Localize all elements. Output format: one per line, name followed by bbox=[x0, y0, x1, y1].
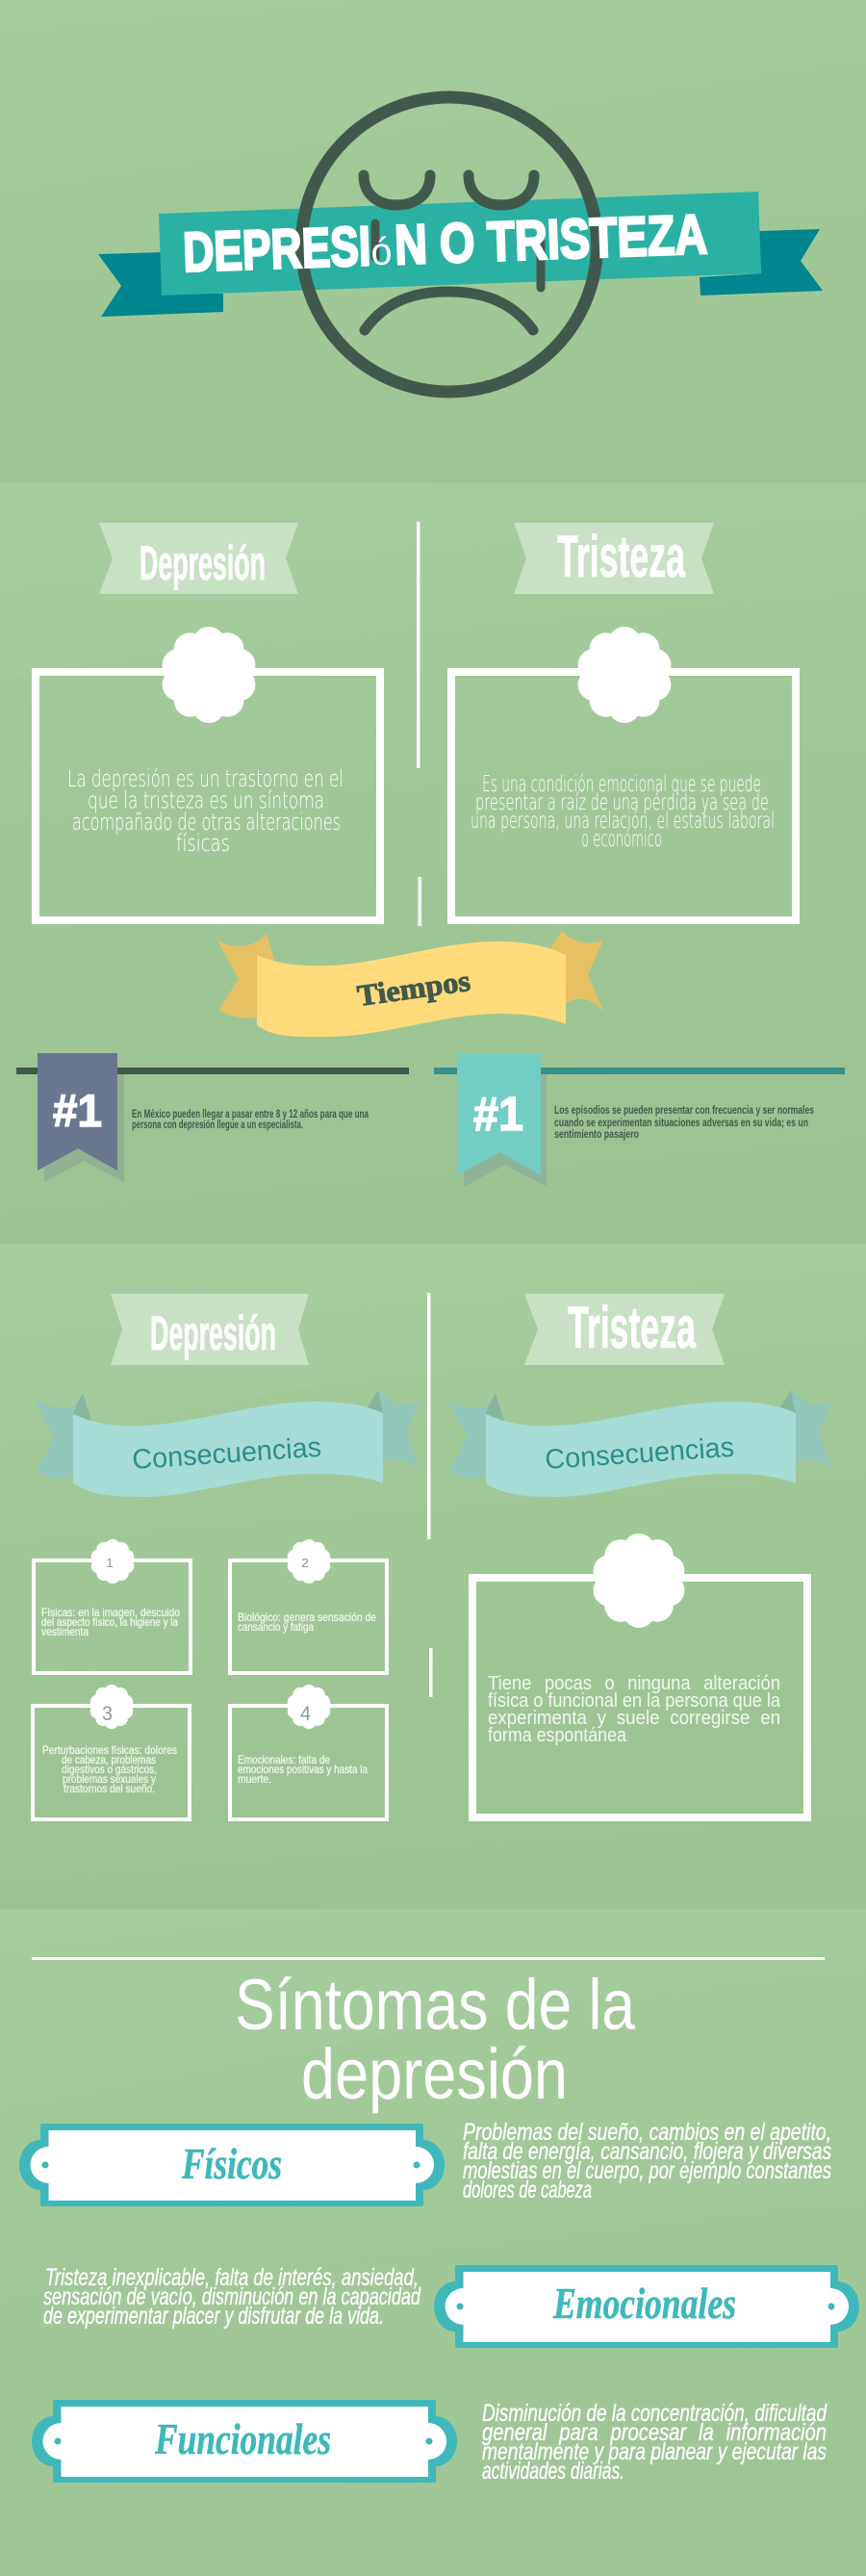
heading ribbon: Depresión consecuencias bbox=[111, 1294, 309, 1365]
bookmark #1 tristeza bbox=[457, 1053, 547, 1187]
plaque: Funcionales: Funcionales bbox=[154, 2414, 331, 2463]
panel: biológico bbox=[230, 1539, 387, 1673]
panel: físicas: vestimenta bbox=[41, 1625, 89, 1638]
panel: perturbaciones físicas bbox=[33, 1685, 190, 1819]
text: síntomas funcionales: actividades diarias. bbox=[482, 2458, 624, 2485]
banner main bbox=[159, 192, 761, 296]
panel: emocionales: 4 bbox=[300, 1703, 311, 1725]
heading ribbon: Depresión consecuencias: Depresión bbox=[150, 1306, 276, 1360]
heading ribbon: Tristeza consecuencias: Tristeza bbox=[568, 1295, 697, 1360]
heading ribbon: Tristeza consecuencias bbox=[524, 1294, 725, 1365]
text: síntomas emocionales: de experimentar placer y disfrutar de la vida. bbox=[43, 2303, 384, 2330]
panel: físicas: Físicas: en la imagen, descuido bbox=[41, 1606, 180, 1619]
title: Síntomas de la depresión: Síntomas de la bbox=[235, 1965, 636, 2045]
text block: física o funcional en la persona que la bbox=[488, 1690, 781, 1712]
text: tiempos depresión: En México pueden llegar a pasar entre 8 y 12 años para que una bbox=[132, 1109, 369, 1121]
vertical divider bbox=[427, 1293, 433, 1697]
title bbox=[182, 203, 708, 284]
panel: perturbaciones físicas: trastornos del sueño. bbox=[64, 1782, 155, 1795]
bookmark #1 depresión bbox=[38, 1053, 124, 1182]
text: tiempos tristeza bbox=[554, 1105, 814, 1141]
panel: físicas bbox=[34, 1539, 191, 1673]
plaque: Emocionales: Emocionales bbox=[552, 2279, 736, 2328]
text: tiempos depresión bbox=[132, 1109, 369, 1131]
panel: perturbaciones físicas: de cabeza, problemas bbox=[62, 1753, 156, 1766]
header: sad face with title banner bbox=[98, 97, 823, 392]
text block: Tiene pocas o ninguna alteración bbox=[488, 1673, 780, 1694]
text block: que la tristeza es un síntoma bbox=[88, 787, 324, 814]
icon: sad face bbox=[302, 97, 597, 392]
panel: consecuencias tristeza bbox=[472, 1533, 807, 1817]
panel: perturbaciones físicas: digestivos o gástricos, bbox=[62, 1763, 157, 1776]
panel: perturbaciones físicas: 3 bbox=[102, 1703, 113, 1725]
panel: definición tristeza bbox=[451, 627, 796, 920]
title: ó bbox=[370, 230, 393, 273]
text: tiempos tristeza: sentimiento pasajero bbox=[554, 1129, 639, 1141]
text block bbox=[488, 1673, 781, 1746]
text block: o económico bbox=[581, 827, 662, 852]
text block: forma espontánea bbox=[488, 1725, 627, 1746]
heading ribbon: Tristeza bbox=[514, 523, 714, 594]
text: tiempos depresión: persona con depresión llegue a un especialista. bbox=[132, 1120, 303, 1131]
ribbon: Consecuencias depresión bbox=[35, 1390, 420, 1497]
title: DEPRESI bbox=[182, 215, 371, 284]
title: Síntomas de la depresión: depresión bbox=[301, 2034, 568, 2114]
text: síntomas emocionales: Tristeza inexplicable, falta de interés, ansiedad, bbox=[45, 2264, 419, 2291]
bookmark #1 depresión: #1 bbox=[53, 1085, 102, 1136]
text: síntomas emocionales bbox=[43, 2264, 421, 2330]
banner tail left bbox=[98, 252, 223, 317]
panel: físicas: del aspecto físico, la higiene y la bbox=[41, 1615, 178, 1629]
panel: biológico: 2 bbox=[301, 1556, 309, 1570]
divider bbox=[32, 1957, 825, 1960]
text block: La depresión es un trastorno en el bbox=[67, 765, 344, 792]
title: Síntomas de la depresión bbox=[235, 1965, 636, 2114]
text: síntomas emocionales: sensación de vacío, disminución en la capacidad bbox=[43, 2283, 421, 2310]
ribbon: Consecuencias tristeza: Consecuencias bbox=[544, 1432, 735, 1476]
plaque: Emocionales bbox=[434, 2265, 859, 2348]
ribbon: Tiempos: Tiempos bbox=[355, 964, 472, 1013]
title: N O TRISTEZA bbox=[394, 203, 708, 276]
vertical divider bbox=[417, 522, 421, 926]
text: síntomas físicos: dolores de cabeza bbox=[463, 2177, 592, 2203]
panel: biológico: Biológico: genera sensación de bbox=[238, 1610, 376, 1624]
panel: emocionales: emociones positivas y hasta la bbox=[238, 1763, 368, 1776]
text block: experimenta y suele corregirse en bbox=[488, 1708, 780, 1729]
text: síntomas físicos bbox=[463, 2119, 831, 2203]
panel: físicas: 1 bbox=[106, 1556, 114, 1570]
panel: definición depresión bbox=[36, 627, 380, 920]
panel: biológico: cansancio y fatiga bbox=[238, 1620, 314, 1634]
plaque: Físicos bbox=[19, 2124, 445, 2206]
heading ribbon: Tristeza: Tristeza bbox=[557, 524, 686, 589]
banner tail right bbox=[700, 229, 823, 296]
ribbon: Tiempos bbox=[217, 931, 603, 1037]
heading ribbon: Depresión: Depresión bbox=[140, 536, 266, 590]
plaque: Físicos: Físicos bbox=[181, 2139, 282, 2188]
ribbon: Consecuencias tristeza bbox=[447, 1390, 833, 1497]
text block: acompañado de otras alteraciones bbox=[72, 809, 341, 836]
panel: perturbaciones físicas: Perturbaciones físicas: dolores bbox=[42, 1743, 177, 1757]
plaque: Funcionales bbox=[32, 2400, 457, 2483]
text: síntomas funcionales bbox=[482, 2400, 828, 2485]
bar: tiempos tristeza bbox=[434, 1068, 845, 1074]
panel: emocionales: muerte. bbox=[238, 1772, 271, 1786]
text block bbox=[471, 772, 775, 852]
ribbon: Consecuencias depresión: Consecuencias bbox=[131, 1432, 322, 1476]
bookmark #1 tristeza: #1 bbox=[473, 1089, 523, 1141]
bar: tiempos depresión bbox=[16, 1068, 409, 1074]
panel: emocionales bbox=[230, 1685, 387, 1819]
panel: emocionales: Emocionales: falta de bbox=[238, 1753, 330, 1766]
text block: físicas bbox=[176, 830, 230, 857]
heading ribbon: Depresión bbox=[99, 523, 298, 594]
text block bbox=[67, 765, 344, 857]
panel: perturbaciones físicas: problemas sexuales y bbox=[63, 1772, 156, 1786]
